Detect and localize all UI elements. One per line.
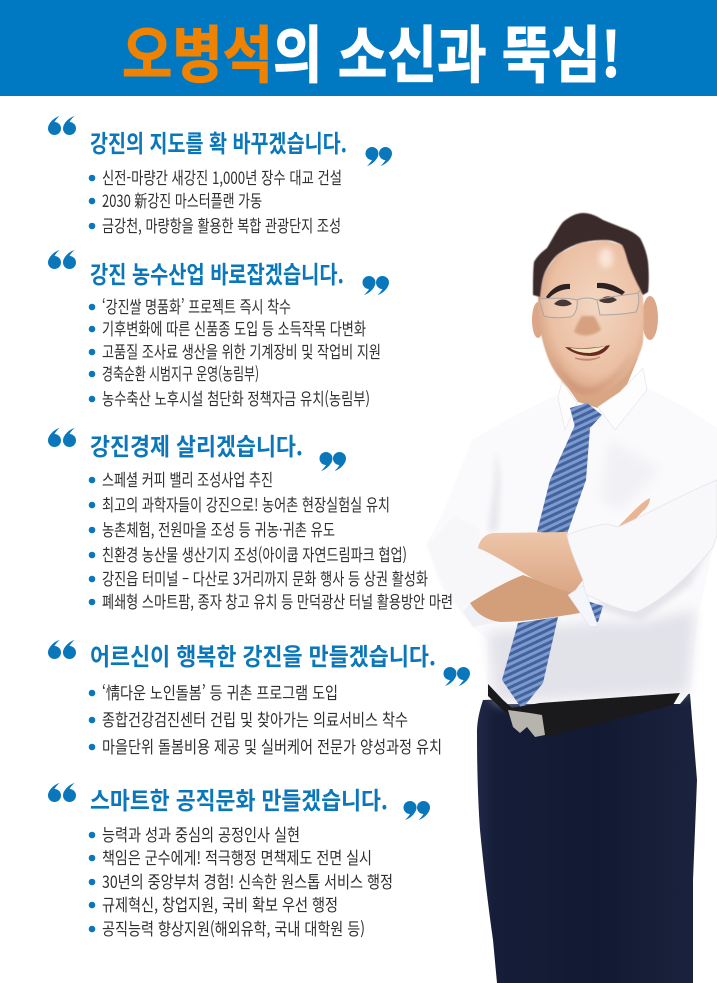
heading: 스마트한 공직문화 만들겠습니다. — [90, 781, 388, 816]
bullet list: 규제혁신, 창업지원, 국비 확보 우선 행정 — [102, 891, 338, 916]
bullet list — [89, 293, 381, 410]
bullet list: 강진읍 터미널 – 다산로 3거리까지 문화 행사 등 상권 활성화 — [102, 565, 428, 590]
lower forearm — [470, 575, 580, 622]
nose — [574, 316, 601, 336]
face — [538, 240, 644, 395]
upper forearm — [478, 532, 583, 593]
heading: 강진의 지도를 확 바꾸겠습니다. — [90, 124, 347, 159]
section 2: agriculture — [48, 250, 389, 410]
section 5: public service culture — [48, 781, 430, 940]
cheek and chin shading — [552, 350, 632, 393]
left sleeve — [428, 515, 523, 612]
hair — [533, 213, 649, 297]
heading: 어르신이 행복한 강진을 만들겠습니다. — [90, 637, 436, 672]
right sleeve — [567, 480, 717, 612]
bullet list: 마을단위 돌봄비용 제공 및 실버케어 전문가 양성과정 유치 — [102, 733, 442, 758]
shirt shading — [488, 440, 713, 702]
bullet list: 농수축산 노후시설 첨단화 정책자금 유치(농림부) — [102, 385, 370, 410]
bullet list — [89, 821, 393, 940]
bullet list: 농촌체험, 전원마을 조성 등 귀농·귀촌 유도 — [102, 516, 335, 541]
ears — [532, 302, 544, 338]
mouth — [565, 345, 610, 356]
bullet list — [89, 679, 442, 758]
tie — [502, 425, 590, 709]
title: 오병석 — [122, 5, 273, 95]
bullet list: ‘情다운 노인돌봄’ 등 귀촌 프로그램 도입 — [102, 679, 338, 704]
opening quote — [48, 640, 76, 659]
left sleeve cuff — [463, 603, 497, 627]
closing quote — [320, 452, 346, 471]
title — [122, 5, 621, 95]
heading: 강진 농수산업 바로잡겠습니다. — [90, 255, 344, 290]
bullet list: 금강천, 마량항을 활용한 복합 관광단지 조성 — [102, 212, 341, 237]
teeth — [570, 346, 606, 353]
eyes — [554, 296, 617, 306]
glasses — [539, 290, 640, 318]
header banner — [0, 0, 717, 96]
belt buckle — [508, 710, 545, 737]
opening quote — [48, 428, 76, 447]
bullet list: 친환경 농산물 생산기지 조성(아이쿱 자연드림파크 협업) — [102, 541, 407, 566]
bullet list: 종합건강검진센터 건립 및 찾아가는 의료서비스 착수 — [102, 706, 408, 731]
bullet list: 책임은 군수에게! 적극행정 면책제도 전면 실시 — [102, 844, 372, 869]
bullet list: 공직능력 향상지원(해외유학, 국내 대학원 등) — [102, 915, 365, 940]
section 4: seniors — [48, 637, 470, 758]
belt — [488, 684, 680, 737]
tie knot — [570, 403, 602, 428]
title: 의 소신과 뚝심! — [273, 5, 621, 95]
bullet list: 스페셜 커피 밸리 조성사업 추진 — [102, 466, 273, 491]
opening quote — [48, 116, 76, 135]
heading: 강진경제 살리겠습니다. — [90, 427, 303, 462]
section 3: economy — [48, 427, 453, 613]
lower lip — [575, 357, 600, 360]
closing quote — [362, 276, 389, 295]
bullet list — [89, 164, 342, 237]
bullet list: 최고의 과학자들이 강진으로! 농어촌 현장실험실 유치 — [102, 491, 390, 516]
head — [532, 213, 658, 395]
closing quote — [404, 801, 430, 820]
section 1: map of Gangjin — [48, 116, 392, 237]
collar — [558, 368, 647, 430]
bullet list: ‘강진쌀 명품화’ 프로젝트 즉시 착수 — [102, 293, 291, 318]
bullet list: 30년의 중앙부처 경험! 신속한 원스톱 서비스 행정 — [102, 868, 393, 893]
opening quote — [48, 783, 76, 802]
bullet list — [89, 466, 453, 613]
folded cuff and tie end — [587, 601, 603, 622]
bullet list: 신전-마량간 새강진 1,000년 장수 대교 건설 — [102, 164, 342, 189]
bullet list: 폐쇄형 스마트팜, 종자 창고 유치 등 만덕광산 터널 활용방안 마련 — [102, 588, 453, 613]
closing quote — [444, 667, 470, 686]
bullet list: 기후변화에 따른 신품종 도입 등 소득작목 다변화 — [102, 315, 366, 340]
opening quote — [48, 250, 76, 269]
shirt torso and sleeves — [426, 388, 717, 704]
bullet list: 능력과 성과 중심의 공정인사 실현 — [102, 821, 300, 846]
bullet list: 2030 新강진 마스터플랜 가동 — [102, 187, 262, 212]
closing quote — [366, 147, 392, 166]
hand — [618, 498, 650, 528]
bullet list: 경축순환 시범지구 운영(농림부) — [102, 360, 259, 385]
eyebrows — [546, 283, 625, 299]
neck — [560, 358, 638, 408]
portrait: man with crossed arms — [426, 213, 717, 983]
forehead highlight — [599, 248, 613, 268]
trousers — [477, 692, 697, 983]
bullet list: 고품질 조사료 생산을 위한 기계장비 및 작업비 지원 — [102, 338, 381, 363]
